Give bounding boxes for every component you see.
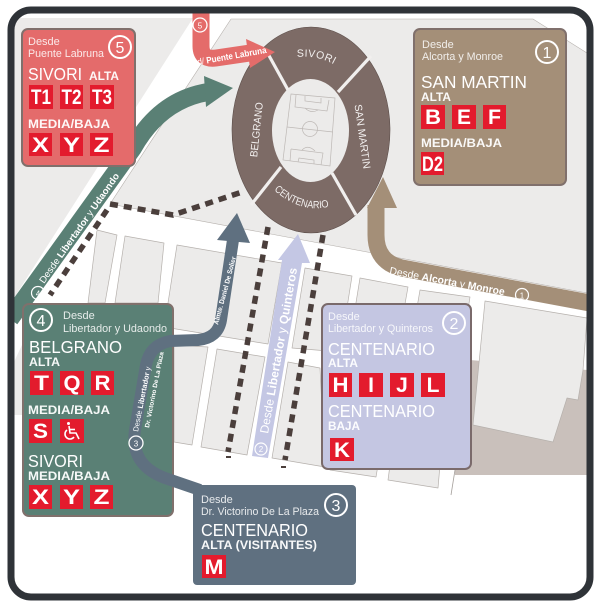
arrow: route 5 Puente Labruna: 5 xyxy=(198,22,203,30)
panel 5: Puente Labruna: ALTA xyxy=(89,69,119,83)
panel 5: Puente Labruna xyxy=(22,29,135,166)
stadium xyxy=(232,26,390,234)
panel 5: Puente Labruna: T3 xyxy=(92,86,112,109)
panel 4: Libertador y Udaondo: BELGRANO xyxy=(29,337,122,357)
panel 4: Libertador y Udaondo: S xyxy=(33,420,48,443)
panel 2: Libertador y Quinteros xyxy=(322,304,471,469)
panel 1: Alcorta y Monroe: ALTA xyxy=(421,90,451,104)
arrow: route 2 Libertador y Quinteros: Desde Libertador y Quinteros xyxy=(257,266,300,435)
arrow: route 3 Dr. Victorino De La Plaza: Desde Libertador y xyxy=(131,366,153,432)
panel 3: Dr. Victorino De La Plaza: 3 xyxy=(332,498,341,515)
panel 4: Libertador y Udaondo: Q xyxy=(64,372,80,395)
stand dividers xyxy=(251,52,371,215)
arrow: route 2 Libertador y Quinteros: 2 xyxy=(259,445,264,454)
panel 3: Dr. Victorino De La Plaza: Dr. Victorino De La Plaza xyxy=(201,506,320,518)
panel 2: Libertador y Quinteros: 2 xyxy=(450,316,459,333)
panel 3: Dr. Victorino De La Plaza: ALTA (VISITANTES) xyxy=(201,538,317,552)
stand labels: BELGRANO xyxy=(248,102,266,158)
panel 2: Libertador y Quinteros: ALTA xyxy=(328,356,358,370)
stand labels: SAN MARTIN xyxy=(352,104,372,170)
panel 4: Libertador y Udaondo xyxy=(23,304,173,516)
panel 4: Libertador y Udaondo: ALTA xyxy=(29,355,60,369)
panel 4: Libertador y Udaondo: 4 xyxy=(37,313,46,330)
football pitch markings xyxy=(283,94,335,166)
stand labels xyxy=(248,49,372,208)
panel 4: Libertador y Udaondo: SIVORI xyxy=(28,451,83,471)
arrow: route 1 Alcorta y Monroe: 1 xyxy=(520,292,525,300)
panel 5: Puente Labruna: MEDIA/BAJA xyxy=(28,117,110,131)
panel 4: Libertador y Udaondo: Y xyxy=(63,486,80,509)
stadium stands ring xyxy=(232,27,390,233)
arrow: route 3 Dr. Victorino De La Plaza: Almte. Daniel De Solier xyxy=(213,256,238,326)
panel 3: Dr. Victorino De La Plaza: CENTENARIO xyxy=(201,520,308,540)
panel 5: Puente Labruna: Y xyxy=(63,134,80,157)
panel 1: Alcorta y Monroe: 1 xyxy=(543,45,552,62)
panel 4: Libertador y Udaondo: X xyxy=(32,486,49,509)
panel 2: Libertador y Quinteros: I xyxy=(368,374,374,397)
panel 5: Puente Labruna: 5 xyxy=(116,40,125,57)
panel 1: Alcorta y Monroe: Alcorta y Monroe xyxy=(422,51,503,63)
panel 4: Libertador y Udaondo: MEDIA/BAJA xyxy=(28,403,110,417)
panel 5: Puente Labruna: X xyxy=(32,134,49,157)
panel 4: Libertador y Udaondo: Desde xyxy=(63,310,95,322)
arrow: route 3 Dr. Victorino De La Plaza: 3 xyxy=(134,440,139,448)
arrow: route 5 Puente Labruna: d/ Puente Labruna xyxy=(197,45,268,67)
panel 4: Libertador y Udaondo: Libertador y Udaondo xyxy=(63,323,167,335)
panel 2: Libertador y Quinteros: CENTENARIO xyxy=(328,401,435,421)
arrow: route 1 Alcorta y Monroe xyxy=(367,177,590,303)
panel 4: Libertador y Udaondo: T xyxy=(34,372,49,395)
panel 1: Alcorta y Monroe: F xyxy=(488,106,501,129)
arrow: route 4 Libertador y Udaondo xyxy=(10,76,233,319)
panel 4: Libertador y Udaondo: R xyxy=(94,372,110,395)
panel 2: Libertador y Quinteros: Libertador y Quinteros xyxy=(328,323,433,335)
arrow: route 4 Libertador y Udaondo: Desde Libertador y Udaondo xyxy=(37,171,122,286)
panel 5: Puente Labruna: Desde xyxy=(28,36,60,48)
dashed walking route to Belgrano xyxy=(110,192,242,215)
panel 1: Alcorta y Monroe: MEDIA/BAJA xyxy=(421,136,502,150)
panel 2: Libertador y Quinteros: L xyxy=(427,374,440,397)
panel 1: Alcorta y Monroe: D2 xyxy=(422,153,443,176)
panel 4: Libertador y Udaondo: MEDIA/BAJA xyxy=(28,469,110,483)
panel 2: Libertador y Quinteros: J xyxy=(396,374,408,397)
panel 1: Alcorta y Monroe: Desde xyxy=(422,39,454,51)
panel 4: Libertador y Udaondo: Z xyxy=(94,486,110,509)
panel 2: Libertador y Quinteros: H xyxy=(332,374,348,397)
arrow: route 1 Alcorta y Monroe: Desde Alcorta y Monroe xyxy=(388,265,506,298)
icon: wheelchair xyxy=(65,422,79,439)
panel 1: Alcorta y Monroe: E xyxy=(457,106,471,129)
dashed walking route along Libertador xyxy=(50,210,107,295)
panel 5: Puente Labruna: T2 xyxy=(62,86,82,109)
panel 3: Dr. Victorino De La Plaza: M xyxy=(204,556,224,579)
panel 1: Alcorta y Monroe: SAN MARTIN xyxy=(421,72,527,92)
panel 2: Libertador y Quinteros: CENTENARIO xyxy=(328,339,435,359)
dashed walking route right of Quinteros xyxy=(281,235,323,468)
dashed walking route left of Quinteros xyxy=(226,227,268,458)
arrow: route 5 Puente Labruna xyxy=(193,10,275,68)
stand labels: CENTENARIO xyxy=(276,186,328,208)
arrow: route 4 Libertador y Udaondo: 4 xyxy=(36,290,41,298)
street map background xyxy=(14,18,587,495)
arrow: route 2 Libertador y Quinteros xyxy=(252,234,310,458)
panel 2: Libertador y Quinteros: Desde xyxy=(328,311,360,323)
pitch area xyxy=(272,79,349,182)
panel 5: Puente Labruna: T1 xyxy=(31,86,51,109)
arrow: route 3 Dr. Victorino De La Plaza xyxy=(129,213,250,490)
panel 5: Puente Labruna: SIVORI xyxy=(28,64,82,84)
stand labels: SIVORI xyxy=(297,49,336,64)
panel 1: Alcorta y Monroe: B xyxy=(425,106,441,129)
panel 2: Libertador y Quinteros: BAJA xyxy=(328,419,360,433)
panel 3: Dr. Victorino De La Plaza: Desde xyxy=(201,494,233,506)
panel 5: Puente Labruna: Puente Labruna xyxy=(28,48,105,60)
panel 3: Dr. Victorino De La Plaza xyxy=(193,485,356,585)
panel 2: Libertador y Quinteros: K xyxy=(334,439,350,462)
panel 1: Alcorta y Monroe xyxy=(414,29,566,185)
panel 5: Puente Labruna: Z xyxy=(94,134,110,157)
arrow: route 3 Dr. Victorino De La Plaza: Dr. Victorino De La Plaza xyxy=(144,351,166,428)
